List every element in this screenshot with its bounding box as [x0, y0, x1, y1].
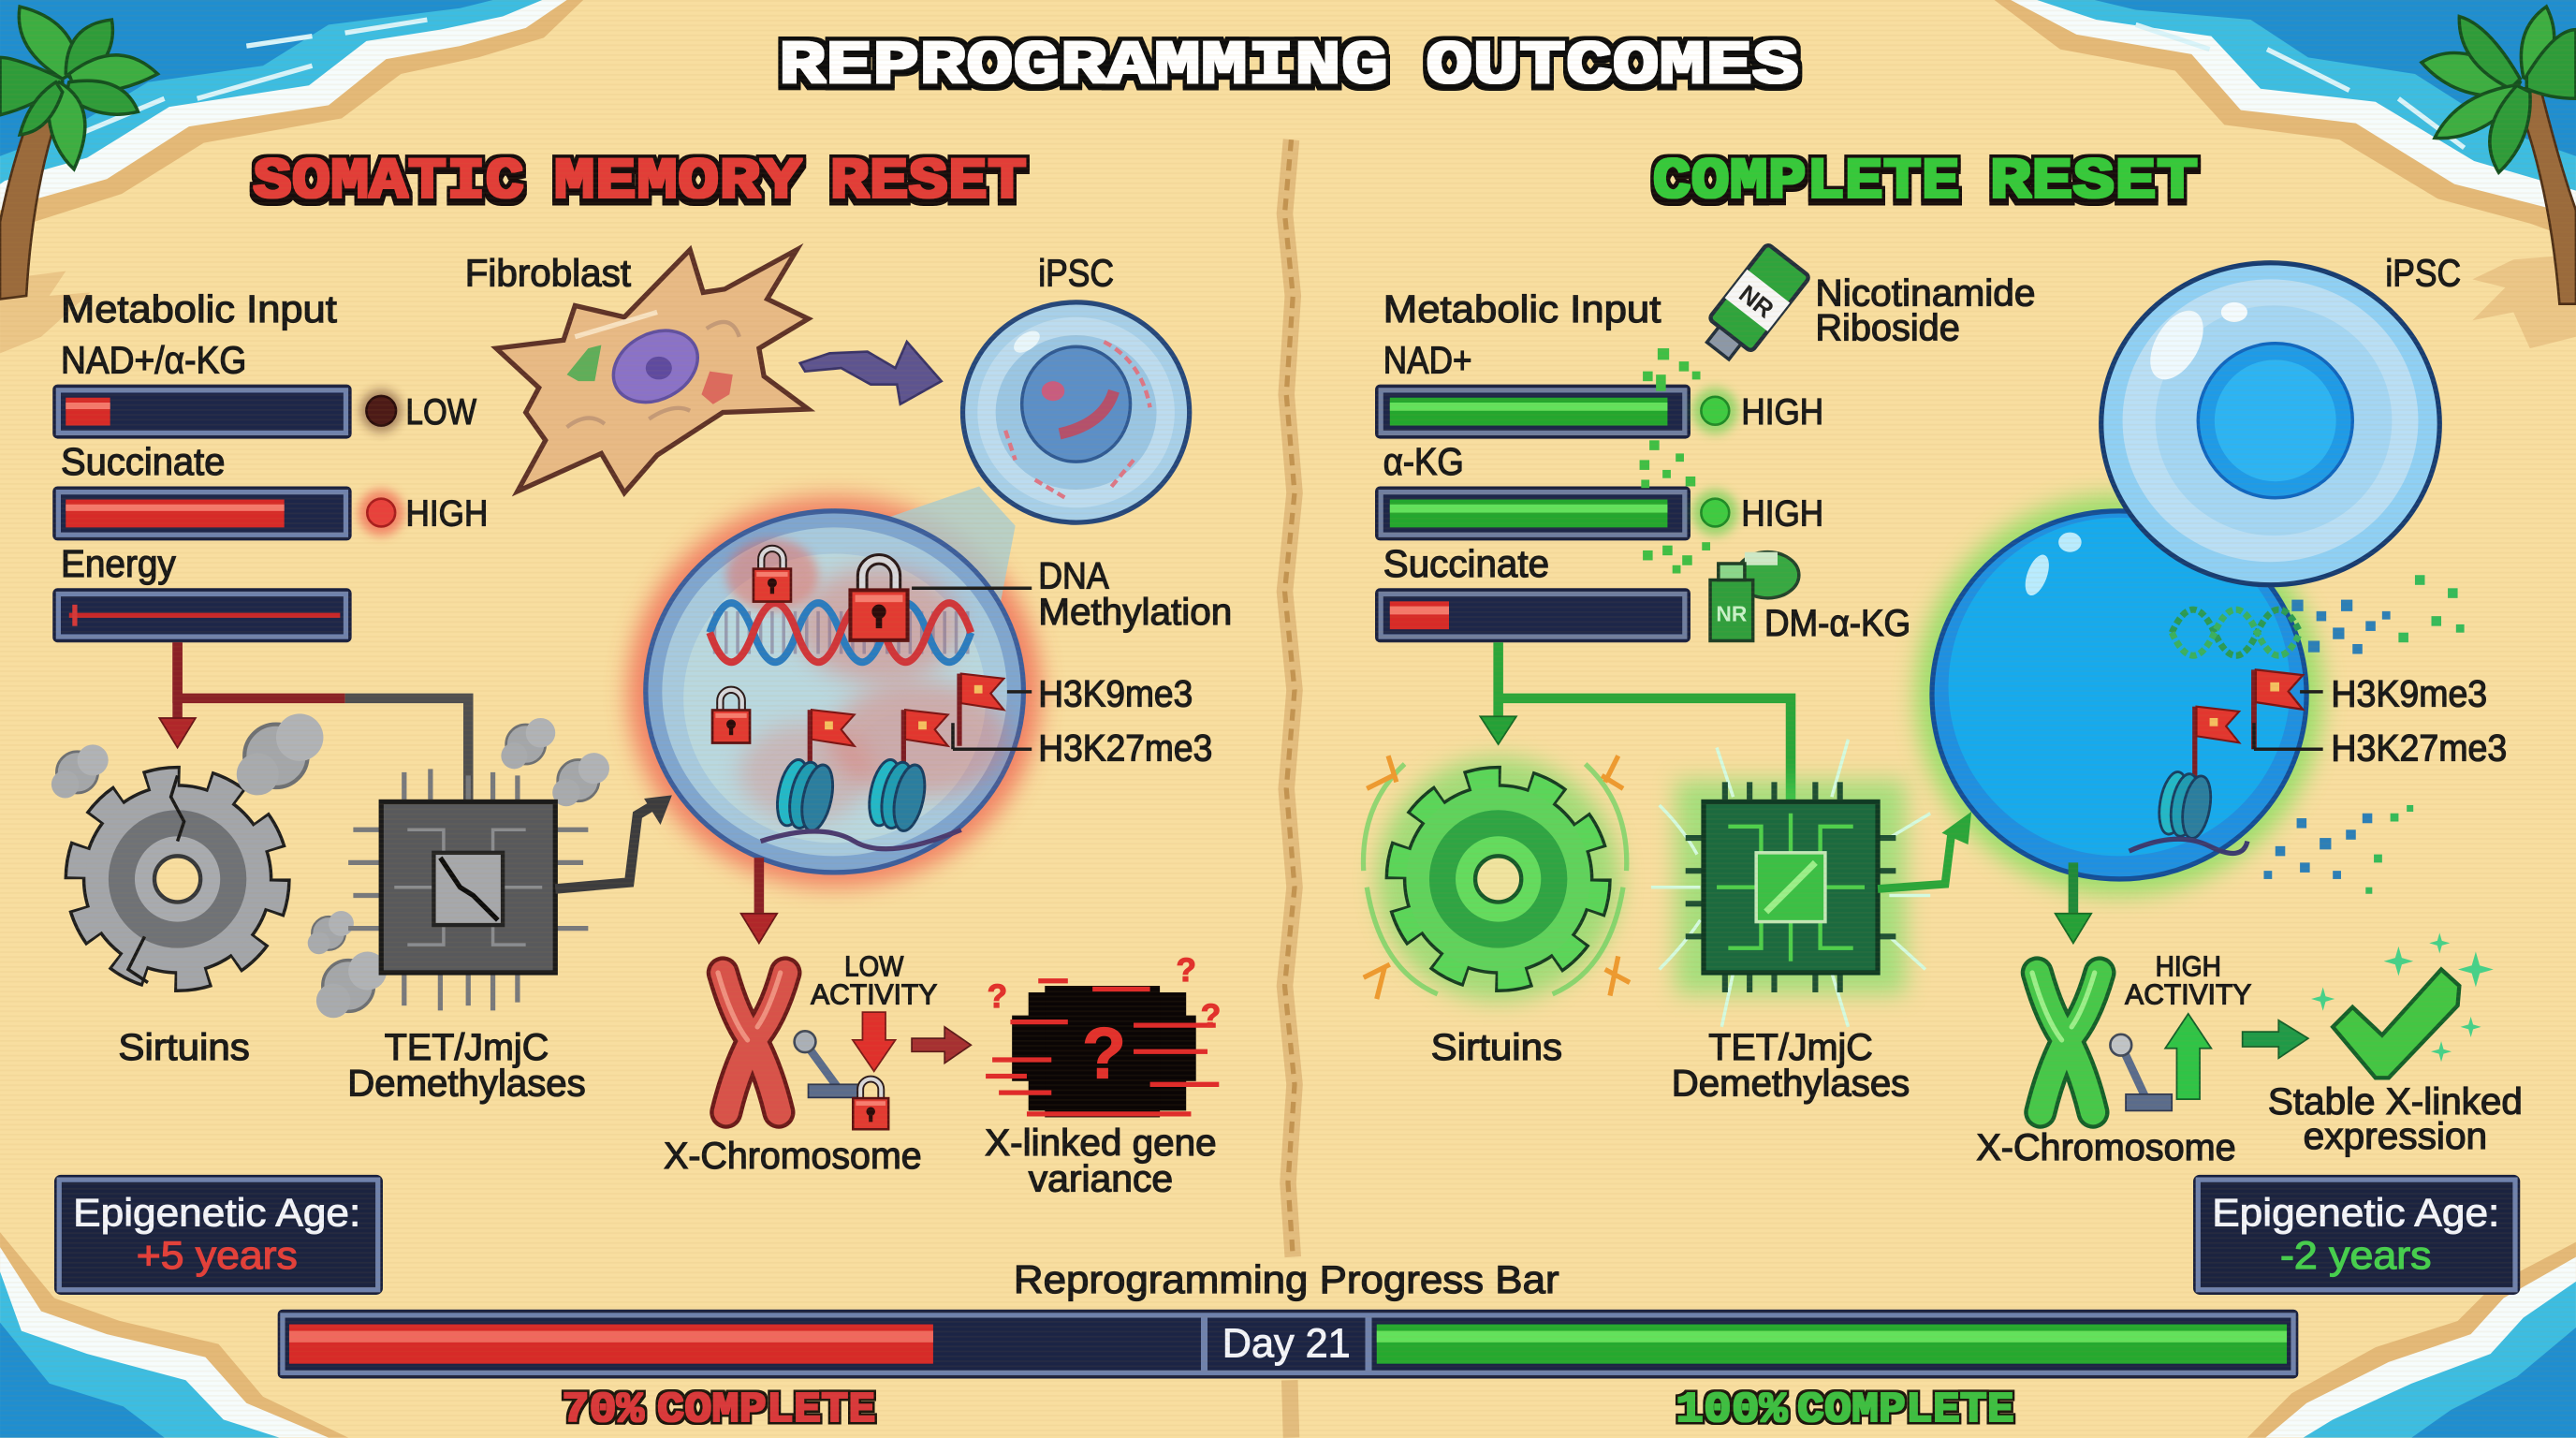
panel: epigenetic age right [2193, 1175, 2520, 1295]
fibroblast label: Fibroblast [465, 251, 631, 294]
iPSC label left: iPSC [1038, 251, 1114, 294]
icon: red x chromosome [718, 973, 785, 1112]
heading: somatic memory reset: MEMORY [554, 151, 802, 215]
label: succinate right: Succinate [1383, 542, 1549, 585]
label: DNA methylation [1038, 555, 1232, 633]
label: low activity: LOW [844, 949, 903, 982]
beach corner: bottom right [2247, 1242, 2576, 1438]
sparkles [2311, 932, 2494, 1062]
arrow: up high activity [2165, 1014, 2211, 1099]
label: progress bar: Reprogramming Progress Bar [1014, 1257, 1559, 1301]
green particles [1640, 348, 1710, 574]
icon: nucleosome 1 [772, 757, 838, 833]
label: x-linked gene variance: variance [1029, 1158, 1173, 1199]
icon: green x chromosome [2032, 973, 2100, 1112]
beach corner: top left [0, 0, 583, 233]
icon: glitched question block: ? [1201, 998, 1221, 1034]
heading: complete reset: COMPLETE [1653, 151, 1960, 215]
icon: broken chip [348, 769, 588, 1010]
icon: healthy chip [1651, 740, 1930, 1027]
label: 70% complete: 70% [562, 1386, 645, 1434]
label: 100% complete [1676, 1386, 2014, 1434]
title: OUTCOMES [1426, 33, 1799, 101]
icon: lever left [795, 1031, 857, 1097]
panel: epigenetic age left: Epigenetic Age: [73, 1190, 360, 1234]
label: high activity: HIGH [2156, 949, 2221, 982]
panel: left nucleus [627, 486, 1042, 888]
label: DM-α-KG: DM-α-KG [1764, 603, 1910, 644]
icon: lock small left [712, 690, 750, 743]
smoke puffs gear [51, 713, 609, 1018]
icon: lock on x chromosome [853, 1079, 888, 1129]
icon: iPSC left [963, 302, 1190, 522]
text: α-KG high: HIGH [1741, 494, 1823, 535]
arrow: to gene variance [912, 1027, 971, 1064]
arrow: chip to nucleus [555, 795, 672, 888]
title: REPROGRAMMING [779, 33, 1388, 101]
progress fill: 100% green [1377, 1325, 2287, 1364]
heading: complete reset: RESET [1989, 151, 2198, 215]
icon: dissolving DNA [2172, 609, 2300, 655]
panel: epigenetic age left [54, 1175, 383, 1295]
palm tree: left [0, 7, 158, 353]
label: low activity [811, 949, 937, 1010]
label: DNA methylation: DNA [1038, 555, 1109, 596]
icon: broken gear [82, 775, 272, 983]
icon: glitched question block: ? [1176, 952, 1196, 989]
panel: left metabolic input [52, 287, 488, 642]
icon: lock small top [754, 549, 791, 602]
bar: energy [52, 588, 352, 642]
label: H3K9me3 left: H3K9me3 [1038, 674, 1193, 715]
connector: left metabolic to enzymes [159, 642, 468, 805]
icon: healthy gear [1363, 757, 1627, 1001]
title [779, 33, 1799, 101]
heading: complete reset [1653, 151, 2198, 215]
panel: epigenetic age right: -2 years [2280, 1233, 2431, 1277]
icon: flag middle [808, 710, 855, 782]
beach corner: top right [1995, 0, 2576, 240]
icon: glitched question block: ? [988, 978, 1007, 1015]
icon: check mark [2333, 969, 2459, 1078]
leader lines right [2254, 692, 2323, 749]
label: nicotinamide riboside [1815, 272, 2036, 348]
arrow: to stable expression [2243, 1020, 2308, 1058]
text: high: HIGH [406, 494, 488, 535]
label: succinate: Succinate [61, 440, 225, 483]
label: α-KG: α-KG [1383, 440, 1464, 483]
indicator: high [359, 490, 404, 536]
panel: epigenetic age right: Epigenetic Age: [2212, 1190, 2499, 1234]
sparks gear [1364, 756, 1630, 999]
connector: right metabolic to enzymes [1480, 642, 1791, 805]
label: TET/JmjC right [1672, 1027, 1910, 1105]
bar: succinate high [52, 486, 352, 540]
label: H3K27me3 left: H3K27me3 [1038, 728, 1212, 770]
heading: somatic memory reset [253, 151, 1027, 215]
icon: glitched question block [986, 952, 1221, 1117]
bar: succinate low [1375, 588, 1690, 642]
label: high activity [2125, 949, 2251, 1010]
label: x-linked gene variance: X-linked gene [985, 1123, 1217, 1164]
icon: lock big [850, 559, 908, 640]
icon: nicotinamide riboside bottle: NR [1734, 279, 1779, 324]
indicator: NAD+ high [1692, 388, 1738, 433]
panel: right metabolic input [1375, 287, 1823, 642]
heading: somatic memory reset: SOMATIC [253, 151, 524, 215]
label: 70% complete: COMPLETE [657, 1386, 875, 1434]
heading: somatic memory reset: RESET [829, 151, 1027, 215]
centre divider crack [1284, 139, 1295, 1438]
icon: DNA helix [710, 603, 971, 662]
icon: fibroblast cell [496, 250, 809, 493]
beach corner: bottom left [0, 1232, 348, 1438]
text: low: LOW [406, 392, 476, 433]
label: TET/JmjC left: TET/JmjC [385, 1027, 549, 1068]
label: TET/JmjC left: Demethylases [347, 1064, 586, 1105]
arrow: nucleus to x chromosome [741, 858, 777, 943]
icon: nucleosome right [2155, 770, 2215, 841]
icon: flag inner [901, 710, 948, 782]
icon: flag right [957, 674, 1003, 746]
indicator: low [359, 389, 402, 433]
label: x chromosome right: X-Chromosome [1976, 1127, 2236, 1168]
label: DNA methylation: Methylation [1038, 592, 1232, 633]
bar: NAD+/α-KG low [52, 385, 352, 439]
label: high activity: ACTIVITY [2125, 977, 2251, 1010]
icon: DM-α-KG bottle: NR [1716, 601, 1747, 625]
label: stable x-linked expression: Stable X-linked [2268, 1081, 2523, 1123]
label: TET/JmjC right: TET/JmjC [1708, 1027, 1873, 1068]
label: NAD+/α-KG: NAD+/α-KG [61, 338, 246, 381]
indicator: α-KG high [1692, 490, 1738, 536]
label: x-linked gene variance [985, 1123, 1217, 1199]
arrow: down low activity [853, 1012, 896, 1071]
label: NAD+: NAD+ [1383, 338, 1472, 381]
label: TET/JmjC right: Demethylases [1672, 1064, 1910, 1105]
progress fill: 70% red [289, 1325, 933, 1364]
text: NAD+ high: HIGH [1741, 392, 1823, 433]
label: stable x-linked expression: expression [2304, 1116, 2487, 1157]
progress bar [278, 1310, 2298, 1378]
arrow: right nucleus to x chromosome [2056, 862, 2091, 943]
bar: α-KG high [1375, 486, 1690, 540]
arrow: chip to right nucleus [1878, 812, 1971, 888]
label: low activity: ACTIVITY [811, 977, 937, 1010]
panel: right nucleus [1915, 494, 2323, 895]
label: sirtuins right: Sirtuins [1431, 1027, 1562, 1068]
label: nicotinamide riboside: Nicotinamide [1815, 272, 2036, 314]
label: 100% complete: COMPLETE [1797, 1386, 2014, 1434]
label: stable x-linked expression [2268, 1081, 2523, 1157]
palm tree: right [2422, 7, 2576, 348]
heading: metabolic input left: Metabolic Input [61, 287, 337, 330]
label: TET/JmjC left [347, 1027, 586, 1105]
arrow: fibroblast to iPSC [800, 342, 942, 404]
leader lines left [912, 588, 1032, 749]
iPSC label right: iPSC [2385, 251, 2461, 294]
icon: lever right [2110, 1034, 2172, 1110]
icon: iPSC right [2101, 263, 2439, 585]
icon: DM-α-KG bottle [1710, 552, 1799, 640]
label: H3K9me3 right: H3K9me3 [2331, 674, 2487, 715]
icon: flag lower [2192, 707, 2239, 779]
icon: flag upper [2251, 669, 2303, 749]
heading: metabolic input right: Metabolic Input [1383, 287, 1661, 330]
panel: epigenetic age left: +5 years [137, 1233, 298, 1277]
icon: nicotinamide riboside bottle [1696, 243, 1810, 368]
label: energy: Energy [61, 542, 177, 585]
label: x chromosome left: X-Chromosome [664, 1136, 922, 1177]
text: day 21: Day 21 [1222, 1321, 1351, 1367]
icon: nucleosome 2 [864, 757, 929, 833]
bar: NAD+ high [1375, 385, 1690, 439]
label: 70% complete [562, 1386, 875, 1434]
label: H3K27me3 right: H3K27me3 [2331, 728, 2507, 770]
label: 100% complete: 100% [1676, 1386, 1788, 1434]
label: nicotinamide riboside: Riboside [1815, 307, 1960, 348]
label: sirtuins left: Sirtuins [118, 1027, 250, 1068]
icon: glitched question block: ? [1082, 1013, 1126, 1093]
dispersing pixels [2263, 575, 2465, 894]
